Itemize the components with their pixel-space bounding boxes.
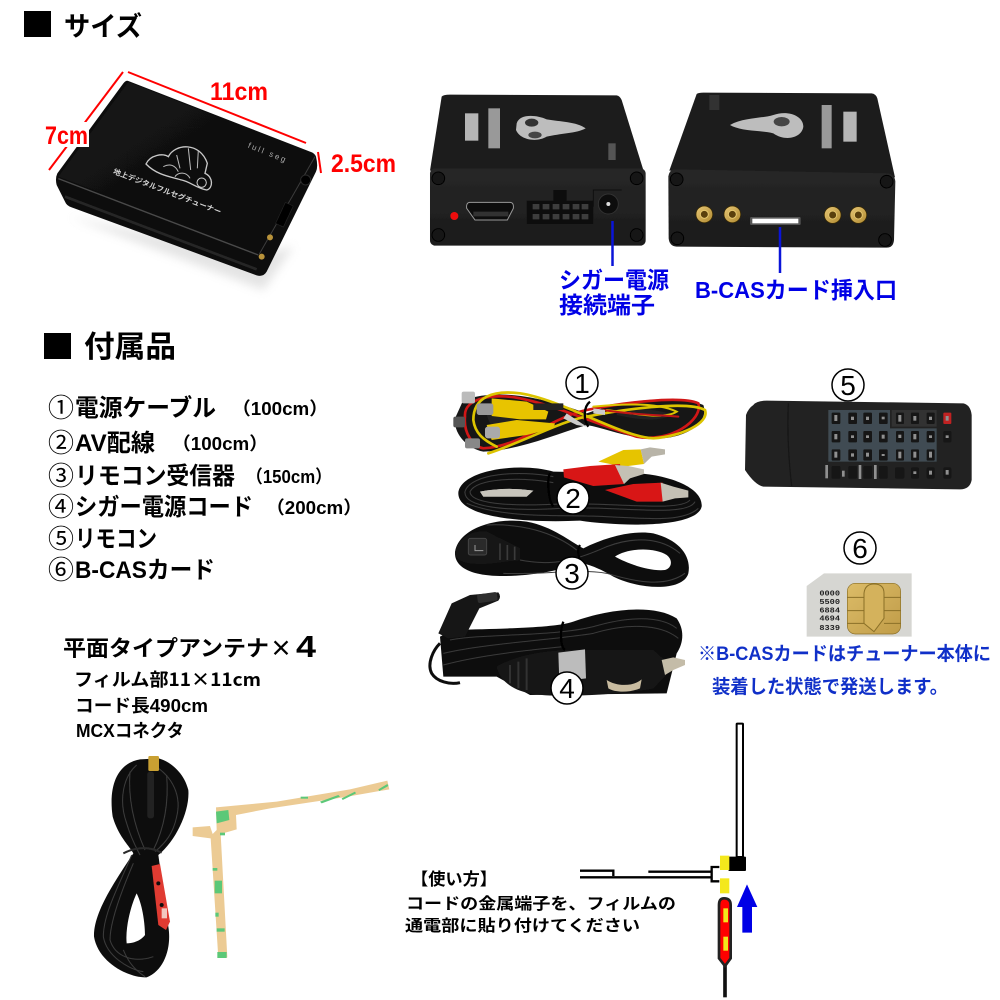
item 4: シガー電源コード	[75, 494, 253, 521]
item 2	[48, 428, 268, 458]
label: 11cm: 11cm	[210, 78, 268, 106]
label: cigar power port	[559, 267, 669, 318]
antenna specs	[74, 666, 261, 741]
item 5	[48, 524, 157, 554]
number badge 2	[557, 482, 589, 514]
label: B-CAS slot: B-CASカード挿入口	[695, 277, 897, 303]
item 5: ⑤	[48, 524, 74, 554]
heading: antenna: 4	[296, 629, 317, 664]
callout line: card slot	[779, 227, 781, 273]
photo: tuner front with B-CAS slot	[668, 93, 895, 248]
photo: B-CAS card: 5500	[819, 599, 840, 607]
photo: B-CAS card	[807, 573, 912, 637]
item 3: ③	[48, 461, 74, 491]
label: 7cm: 7cm	[45, 122, 88, 150]
photo: tuner rear with power port	[430, 95, 646, 246]
diagram: cord terminal	[719, 898, 731, 997]
instructions text: 【使い方】	[411, 869, 497, 889]
photo: cables 1-4	[430, 392, 706, 696]
item 4: ④	[48, 492, 74, 522]
item 5: リモコン	[75, 526, 157, 553]
item 1: ①	[48, 393, 74, 423]
photo: tuner body angled view: full seg	[247, 141, 287, 164]
number badge 4: 4	[559, 673, 575, 704]
cable 1 power harness	[453, 392, 706, 453]
cable 2 AV cable	[458, 447, 702, 525]
callout line: power port	[611, 221, 614, 266]
number badge 1: 1	[574, 368, 590, 399]
number badge 3: 3	[564, 558, 580, 589]
note: card shipped installed	[698, 643, 991, 698]
item 6: B-CASカード	[75, 557, 215, 584]
item 4	[48, 492, 362, 522]
number badge 5	[832, 369, 864, 401]
item 6: ⑥	[48, 555, 74, 585]
item 1: 電源ケーブル	[75, 394, 216, 422]
item 3: リモコン受信器	[75, 463, 235, 490]
heading: size section: サイズ	[64, 11, 142, 42]
number badge 4	[551, 672, 583, 704]
item 3: （150cm）	[246, 467, 332, 487]
heading: antenna: 平面タイプアンテナ	[63, 636, 269, 661]
number badge 6: 6	[852, 533, 868, 564]
note: card shipped installed: ※B-CASカードはチューナー本体に	[698, 643, 991, 665]
dimension line: 7cm	[49, 72, 123, 170]
instructions text	[405, 869, 676, 935]
heading: antenna	[63, 629, 317, 664]
photo: tuner with dimensions	[43, 72, 396, 290]
heading: size section	[24, 11, 142, 42]
antenna specs: コード長490cm	[75, 696, 208, 716]
photo: remote control	[745, 401, 972, 489]
number badge 6	[844, 532, 876, 564]
label: cigar power port: シガー電源	[559, 267, 669, 293]
item 2: （100cm）	[172, 434, 268, 454]
antenna specs: フィルム部11×11cm	[74, 666, 261, 692]
photo: B-CAS card: 8339	[819, 625, 840, 633]
photo: antenna film	[193, 781, 389, 958]
diagram: antenna connection	[580, 724, 757, 997]
item 3	[48, 461, 332, 491]
item 1	[48, 393, 328, 423]
dimension line: 11cm	[128, 72, 306, 143]
heading: antenna: ×	[270, 631, 292, 663]
item 2: ②	[48, 428, 74, 458]
item 4: （200cm）	[266, 498, 362, 518]
instructions text: 通電部に貼り付けてください	[405, 916, 640, 935]
accessories list	[48, 393, 362, 585]
heading: accessories: 付属品	[84, 331, 176, 364]
item 2: AV配線	[75, 430, 155, 457]
note: card shipped installed: 装着した状態で発送します。	[712, 675, 948, 698]
photo: tuner body angled view	[56, 81, 317, 290]
instructions text: コードの金属端子を、フィルムの	[406, 894, 676, 913]
item 1: （100cm）	[232, 399, 328, 419]
photo: B-CAS card: 0000	[819, 590, 840, 598]
photo: tuner body angled view: 地上デジタルフルセグチューナー	[112, 167, 223, 216]
photo: B-CAS card: 6884	[819, 607, 840, 615]
heading: accessories	[44, 331, 176, 364]
dimension line: 2.5cm	[318, 152, 321, 173]
arrow: attach upward	[737, 884, 757, 933]
label: cigar power port: 接続端子	[559, 292, 655, 318]
antenna specs: MCXコネクタ	[76, 721, 184, 741]
cable 4 cigar power cord	[430, 592, 685, 696]
diagram: antenna film element	[580, 724, 746, 893]
number badge 5: 5	[840, 370, 856, 401]
photo: B-CAS card: 4694	[819, 616, 840, 624]
number badge 3	[556, 557, 588, 589]
photo: antenna cable coil	[94, 756, 188, 977]
label: 2.5cm: 2.5cm	[331, 150, 396, 178]
cable 3 remote receiver	[455, 521, 689, 587]
number badge 1	[566, 367, 598, 399]
number badge 2: 2	[565, 483, 581, 514]
